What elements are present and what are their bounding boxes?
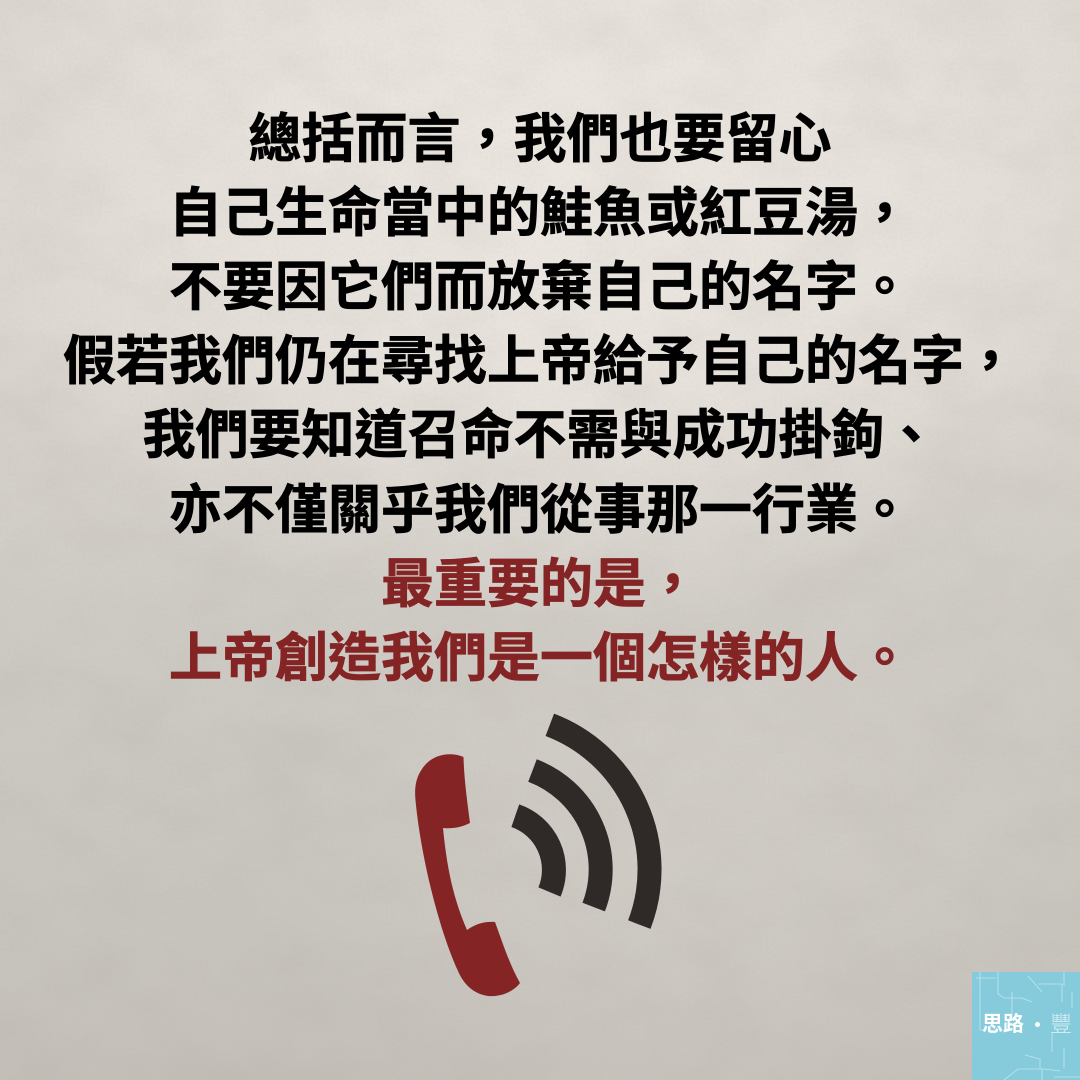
logo separator dot <box>1035 1022 1040 1027</box>
logo name: 思路 <box>982 1013 1024 1036</box>
icon: ringing telephone <box>415 714 662 996</box>
logo character: 豐 <box>1050 1012 1072 1037</box>
text line 6: 亦不僅關乎我們從事那一行業。 <box>169 481 911 540</box>
text line 5: 我們要知道召命不需與成功掛鉤、 <box>142 406 938 465</box>
logo badge <box>972 972 1080 1080</box>
inner wave <box>515 816 554 892</box>
text line 3: 不要因它們而放棄自己的名字。 <box>169 258 911 317</box>
middle wave <box>532 770 601 907</box>
outer wave <box>550 725 650 925</box>
icon: telephone handset <box>415 754 520 996</box>
text line 4: 假若我們仍在尋找上帝給予自己的名字， <box>63 332 1017 391</box>
text line 1: 總括而言，我們也要留心 <box>248 110 832 169</box>
circuit pattern <box>976 972 1080 1080</box>
highlighted line 8: 上帝創造我們是一個怎樣的人。 <box>169 629 911 688</box>
text line 2: 自己生命當中的鮭魚或紅豆湯， <box>169 184 911 243</box>
icon: signal waves <box>515 725 650 925</box>
text block: main message <box>63 110 1017 688</box>
highlighted line 7: 最重要的是， <box>381 555 699 614</box>
